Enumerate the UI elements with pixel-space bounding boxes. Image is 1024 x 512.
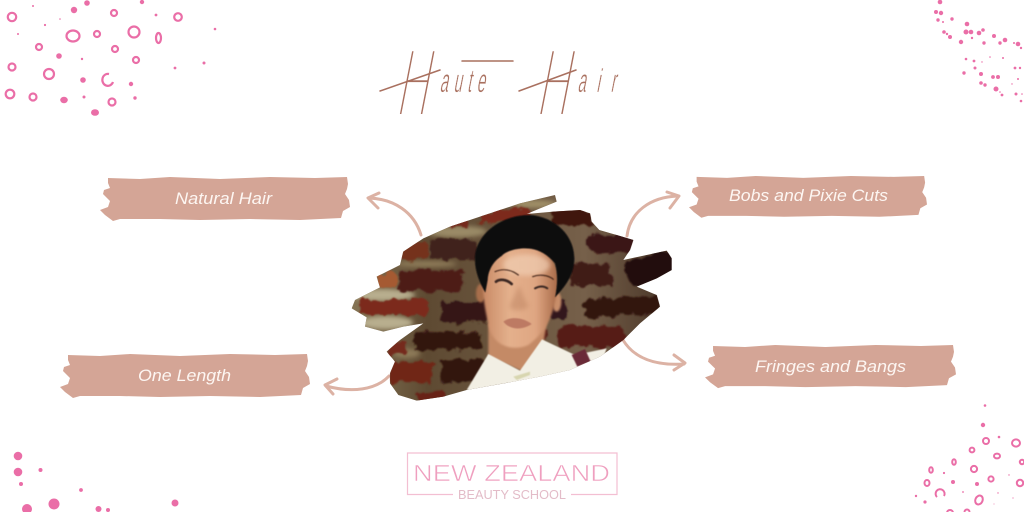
panel: bobs and pixie cuts [689, 176, 927, 218]
title: H [390, 27, 444, 139]
nose shadow [510, 287, 528, 310]
logo: New Zealand Beauty School: BEAUTY SCHOOL [458, 487, 566, 502]
title [380, 27, 639, 139]
hair [475, 215, 574, 297]
collar shadow [513, 372, 530, 380]
logo: New Zealand Beauty School [408, 453, 617, 502]
right ear [552, 292, 561, 312]
bricks [360, 207, 678, 402]
eyebrows and eyes [495, 270, 553, 288]
panel: bobs and pixie cuts: Bobs and Pixie Cuts [729, 187, 888, 205]
panel: fringes and bangs [705, 345, 956, 388]
title: H [530, 27, 585, 139]
forehead highlight [503, 254, 550, 276]
decoration: top-left ring dots [6, 0, 216, 116]
panel: one length [60, 354, 310, 398]
photo wall background [352, 195, 672, 401]
title: aute [438, 62, 505, 100]
decoration: bottom-left dots [14, 452, 179, 512]
left ear [476, 284, 485, 303]
title flourish strokes [380, 61, 576, 91]
panel: one length: One Length [138, 367, 231, 385]
neck [487, 322, 548, 370]
tie strap [572, 349, 591, 367]
shirt [467, 339, 607, 393]
arrow: to one length [325, 376, 389, 394]
face [483, 245, 558, 348]
arrow: to fringes and bangs [623, 340, 685, 370]
panel: natural hair [100, 177, 350, 221]
title: air [576, 62, 632, 100]
decoration: bottom-right ring dots [915, 404, 1024, 512]
panel: natural hair: Natural Hair [175, 190, 274, 208]
panel: fringes and bangs: Fringes and Bangs [755, 358, 906, 376]
photo: woman with short dark hair on brick wall [352, 195, 672, 401]
decoration: top-right dots [934, 0, 1023, 102]
logo: New Zealand Beauty School: NEW ZEALAND [413, 460, 610, 486]
lips [503, 318, 532, 328]
light plaster patches [352, 200, 557, 358]
arrow: to natural hair [368, 193, 421, 235]
arrow: to bobs and pixie cuts [627, 192, 679, 236]
